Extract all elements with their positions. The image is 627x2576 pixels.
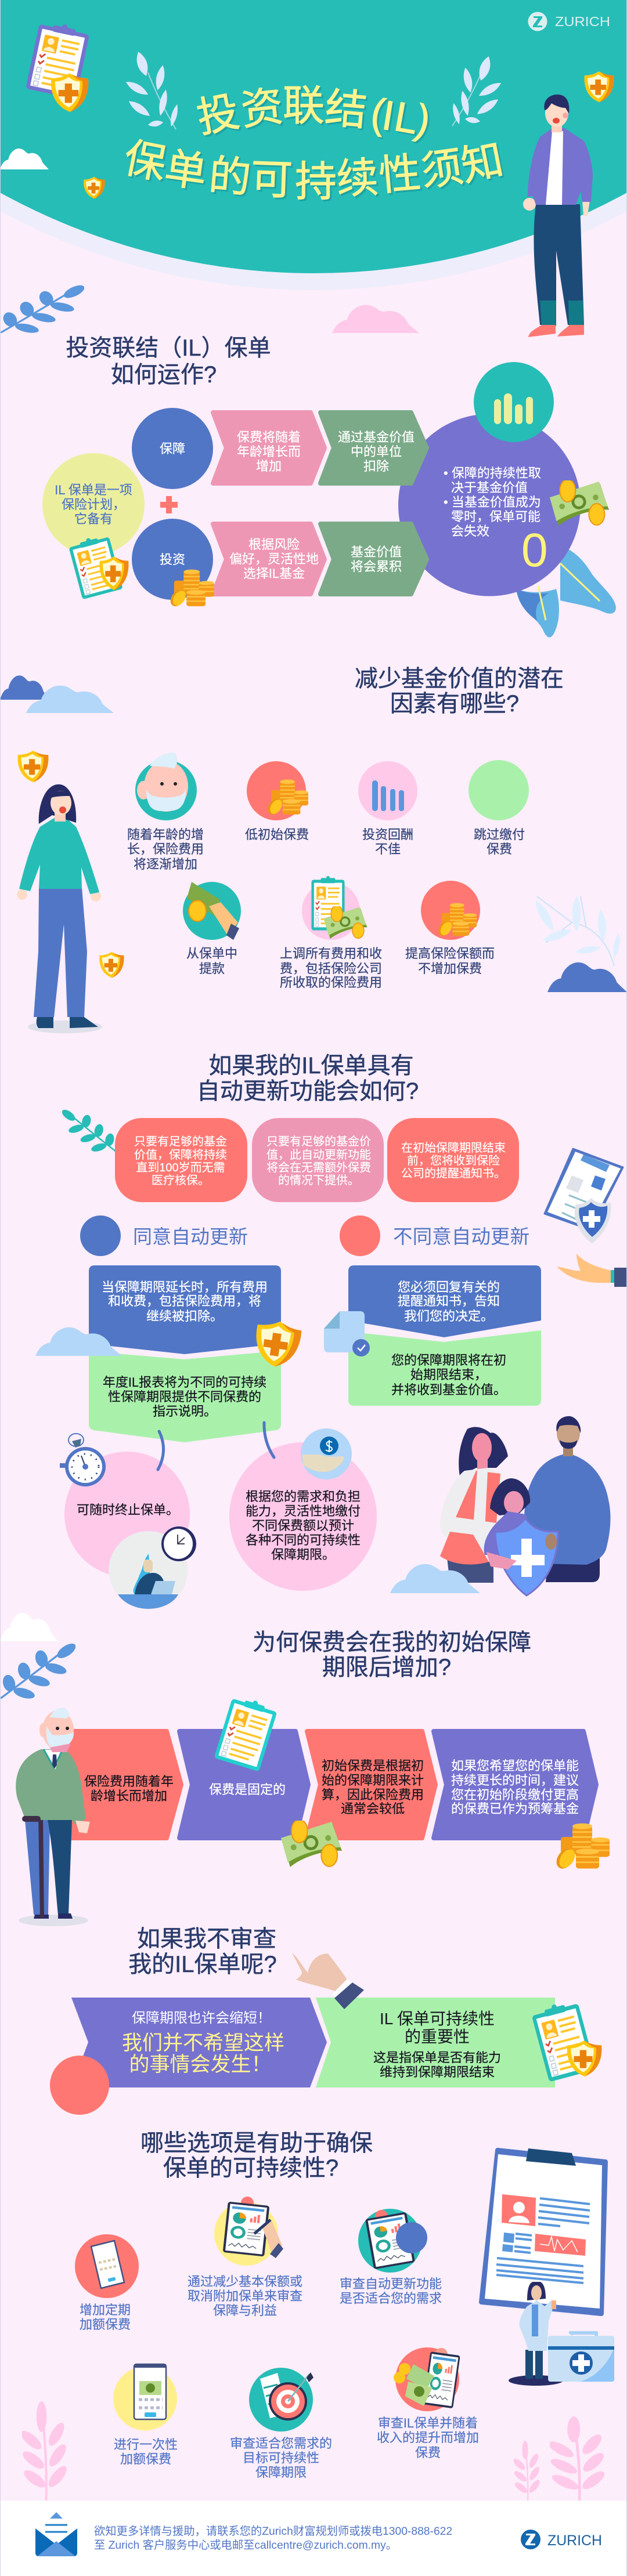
- chevron: flexible funds: 根据风险: [248, 537, 300, 552]
- factor: higher charges: 所收取的保险费用: [280, 975, 382, 990]
- chevron: premium: 年龄增长而: [237, 444, 301, 459]
- factor: higher charges: 费，包括保险公司: [280, 961, 382, 976]
- heading: options: 哪些选项是有助于确保: [140, 2130, 373, 2156]
- chevron: initial premium: 算，因此保险费用: [322, 1788, 424, 1802]
- option: reduce cover: 保障与利益: [213, 2303, 277, 2318]
- cloud: white: [0, 1613, 58, 1641]
- factor: poor returns: [358, 761, 417, 856]
- option: disagree: 不同意自动更新: [393, 1226, 529, 1248]
- option: reduce cover: 通过减少基本保额或: [188, 2274, 302, 2289]
- bubble: flexible premium: 保障期限。: [271, 1547, 335, 1562]
- text: sustainability notes: • 当基金价值成为: [444, 495, 541, 509]
- chevron: pay more early: 的保费已作为预筹基金: [451, 1801, 579, 1816]
- icon: document check: [324, 1311, 370, 1356]
- circle: IL definition: 它备有: [74, 512, 113, 526]
- heading: options: [140, 2130, 373, 2181]
- panel: importance of sustainability: 这是指保单是否有能力: [373, 2050, 501, 2065]
- card: reminder: 公司的提醒通知书。: [401, 1167, 506, 1180]
- factor: missed payment: 跳过缴付: [474, 827, 525, 842]
- card: cover until 100: 医疗核保。: [152, 1174, 210, 1187]
- heading: how IL works: 投资联结（IL）保单: [66, 335, 271, 361]
- clouds: section two: [0, 675, 114, 713]
- panel: cover ends: [348, 1330, 541, 1406]
- panel: agree charges: 和收费，包括保险费用，将: [108, 1294, 261, 1308]
- heading: factors: [355, 666, 564, 717]
- heading: factors: 因素有哪些?: [390, 691, 519, 717]
- icon: pointing hand: [292, 1953, 364, 2009]
- heading: auto renewal: 自动更新功能会如何?: [197, 1079, 419, 1104]
- bubble: flexible premium: 不同保费额以预计: [252, 1518, 354, 1533]
- option: single top-up: 加额保费: [120, 2452, 171, 2466]
- factor: withdrawal: 提款: [199, 961, 225, 976]
- cloud: dark blue: [547, 963, 627, 992]
- option: top up: 增加定期: [80, 2303, 131, 2317]
- panel: reply notice: 提醒通知书，告知: [398, 1294, 500, 1308]
- chevron: premium: 增加: [256, 459, 282, 473]
- factor: poor returns: 不佳: [375, 842, 401, 856]
- icon: clipboard with shield: [26, 19, 91, 112]
- factor: age: 随着年龄的增: [127, 827, 204, 842]
- heading: no review: [128, 1926, 277, 1977]
- bubble: flexible premium: 能力，灵活性地缴付: [246, 1504, 361, 1518]
- option: disagree: [340, 1215, 529, 1256]
- big zero: 0: [521, 524, 548, 577]
- card: cover until 100: 价值，保障将持续: [134, 1148, 227, 1162]
- circle: red accent: [50, 2056, 109, 2115]
- option: agree: 同意自动更新: [133, 1226, 248, 1247]
- bubble: terminate: [64, 1452, 190, 1577]
- factor: low initial premium: [245, 761, 309, 842]
- factor: higher sum assured: [405, 881, 495, 976]
- chevron: deducted: 中的单位: [351, 444, 402, 459]
- text: sustainability notes: 决于基金价值: [451, 480, 528, 495]
- factor: higher charges: [280, 876, 382, 990]
- icon: clipboard and shield: [530, 1998, 601, 2082]
- option: review auto renewal: [340, 2209, 442, 2306]
- heading: no review: 如果我不审查: [137, 1926, 276, 1952]
- icon: plus: [160, 496, 178, 513]
- chevron: flexible funds: 偏好，灵活性地: [229, 552, 319, 566]
- chevron: initial premium: 初始保费是根据初: [322, 1759, 424, 1773]
- chevron: premium rises: [60, 1731, 181, 1838]
- factor: age: 将逐渐增加: [134, 857, 197, 871]
- chevron: pay more early: 持续更长的时间，建议: [451, 1773, 579, 1788]
- chevron: accumulation: 基金价值: [351, 545, 402, 559]
- card: no extra premium: 只要有足够的基金价: [266, 1135, 371, 1148]
- option: reduce cover: [188, 2197, 302, 2318]
- card: cover until 100: 直到100岁而无需: [136, 1161, 225, 1174]
- panel: agree charges: 继续被扣除。: [146, 1309, 223, 1323]
- option: single top-up: 进行一次性: [114, 2437, 178, 2452]
- option: review auto renewal: 是否适合您的需求: [340, 2291, 442, 2306]
- cloud: family: [390, 1564, 480, 1593]
- factor: low initial premium: 低初始保费: [245, 827, 309, 842]
- circle: chart icon: [474, 362, 554, 442]
- panel: annual statement: [89, 1351, 281, 1442]
- chevron: initial premium: 通常会较低: [341, 1801, 405, 1816]
- card: no extra premium: 值，此自动更新功能: [266, 1148, 371, 1162]
- panel: cover ends: 并将收到基金价值。: [391, 1383, 506, 1397]
- heading: why premium increases: 为何保费会在我的初始保障: [253, 1630, 531, 1655]
- text: sustainability notes: 零时，保单可能: [451, 509, 540, 524]
- icon: hand with dollar: [301, 1428, 352, 1479]
- panel: annual statement: 年度IL报表将为不同的可持续: [103, 1375, 266, 1390]
- title: 投资联结(IL): [193, 83, 435, 144]
- panel: importance of sustainability: 维持到保障期限结束: [380, 2065, 495, 2079]
- heading: no review: 我的IL保单呢?: [128, 1952, 277, 1977]
- text: sustainability notes: 会失效: [451, 524, 489, 538]
- option: single top-up: [113, 2364, 178, 2466]
- icon: coins: [553, 1824, 610, 1871]
- sprig: blue: [0, 283, 88, 335]
- chevron: pay more early: 您在初始阶段缴付更高: [451, 1788, 579, 1802]
- option: review with income: 审查IL保单并随着: [378, 2416, 478, 2430]
- option: agree: [80, 1215, 248, 1256]
- option: target: 目标可持续性: [243, 2451, 319, 2465]
- option: review with income: [377, 2347, 479, 2460]
- icon: open hand: [557, 1254, 627, 1287]
- chevron: pay more early: 如果您希望您的保单能: [451, 1759, 579, 1773]
- icon: clipboard: [68, 533, 128, 599]
- logo: Zurich header: [528, 12, 610, 31]
- sprig: blue: [0, 1641, 79, 1701]
- option: review auto renewal: 审查自动更新功能: [340, 2277, 442, 2291]
- icon: money: [550, 479, 609, 526]
- chevron: accumulation: [320, 524, 427, 594]
- card: reminder: 前，您将收到保险: [407, 1154, 500, 1167]
- icon: blue clipboard: [545, 1149, 623, 1243]
- panel: coverage may shorten: 的事情会发生！: [129, 2053, 272, 2076]
- circle: IL definition: 保险计划，: [62, 497, 125, 512]
- title: 保单的可持续性须知: [120, 135, 507, 205]
- factor: higher sum assured: 提高保险保额而: [405, 946, 495, 961]
- chevron: flexible funds: 选择IL基金: [243, 566, 305, 581]
- bubble: flexible premium: 各种不同的可持续性: [246, 1533, 361, 1547]
- card: cover until 100: 只要有足够的基金: [134, 1135, 227, 1148]
- character: woman in teal: [17, 784, 102, 1033]
- icon: envelope: [35, 2512, 77, 2556]
- bubble: terminate: 可随时终止保单。: [77, 1503, 179, 1517]
- icon: money: [281, 1819, 342, 1867]
- text: sustainability notes: • 保障的持续性取: [444, 466, 541, 480]
- icon: shield small: [99, 952, 124, 978]
- factor: poor returns: 投资回酬: [362, 827, 413, 842]
- panel: importance of sustainability: 的重要性: [405, 2028, 470, 2046]
- chevron: deducted: 扣除: [363, 459, 389, 473]
- factor: age: 长，保险费用: [127, 842, 204, 856]
- heading: why premium increases: 期限后增加?: [322, 1655, 451, 1680]
- logo: Zurich footer: ZURICH: [547, 2532, 602, 2549]
- icon: medical box: [548, 2331, 614, 2382]
- illustration: medical report: [481, 2148, 606, 2314]
- icon: wall clock: [161, 1526, 196, 1561]
- factor: higher charges: 上调所有费用和收: [280, 946, 382, 961]
- heading: how IL works: 如何运作?: [111, 362, 217, 388]
- logo: Zurich header: ZURICH: [555, 14, 610, 29]
- laurel: left: [124, 50, 180, 129]
- icon: small shields: [84, 71, 614, 198]
- option: target: 审查适合您需求的: [230, 2436, 332, 2451]
- plant: light leaves: [532, 896, 622, 966]
- connector curves: [158, 1423, 274, 1470]
- chevron: deducted: 通过基金价值: [338, 430, 415, 444]
- circle: IL definition: [42, 453, 145, 555]
- cloud: agree: [35, 1327, 122, 1356]
- panel: coverage may shorten: 我们并不希望这样: [122, 2032, 284, 2054]
- heading: why premium increases: [253, 1630, 531, 1680]
- icon: teal clipboard: [214, 1694, 279, 1772]
- option: reduce cover: 取消附加保单来审查: [188, 2289, 302, 2303]
- chevron: flexible funds: [213, 524, 325, 594]
- circle: result: [398, 414, 581, 596]
- circle: investment: 投资: [160, 552, 185, 567]
- chevron: initial premium: [307, 1731, 435, 1838]
- option: target: [230, 2368, 332, 2480]
- illustration: blue legs: [516, 545, 616, 637]
- panel: reply notice: 我们您的决定。: [404, 1309, 493, 1323]
- option: top up: 加额保费: [80, 2317, 131, 2332]
- icon: tilted shield: [252, 1318, 302, 1370]
- chevron: fixed premium: 保费是固定的: [209, 1782, 286, 1797]
- sprig: teal: [60, 1108, 116, 1153]
- character: doctor: [509, 2282, 563, 2386]
- bubble: flexible premium: [229, 1442, 377, 1591]
- heading: factors: 减少基金价值的潜在: [355, 666, 564, 692]
- header band: [0, 0, 627, 290]
- panel: agree charges: [89, 1265, 281, 1354]
- card: cover until 100: [115, 1118, 247, 1202]
- panel: reply notice: [348, 1265, 541, 1337]
- factor: higher sum assured: 不增加保费: [418, 961, 482, 976]
- chevron: premium rises: 龄增长而增加: [91, 1789, 167, 1803]
- option: target: 保障期限: [255, 2465, 307, 2480]
- chevron: deducted: [320, 413, 427, 483]
- chevron: initial premium: 始的保障期限来计: [322, 1773, 424, 1788]
- panel: importance of sustainability: [316, 1998, 555, 2087]
- logo: Zurich footer: [521, 2530, 602, 2549]
- factor: age: [127, 752, 204, 871]
- chevron: accumulation: 将会累积: [351, 559, 402, 574]
- factor: missed payment: 保费: [487, 842, 512, 856]
- card: no extra premium: [252, 1118, 384, 1202]
- character: man in purple jacket: [523, 95, 593, 337]
- panel: reply notice: 您必须回复有关的: [398, 1280, 500, 1294]
- icon: stopwatch: [60, 1434, 106, 1486]
- text: contact: 欲知更多详情与援助，请联系您的Zurich财富规划师或拨电1300-888-622: [94, 2525, 452, 2538]
- card: no extra premium: 将会在无需额外保费: [266, 1161, 371, 1174]
- panel: cover ends: 始期限结束，: [410, 1367, 487, 1382]
- icon: woman at laptop: [109, 1531, 188, 1609]
- heading: auto renewal: [197, 1053, 419, 1104]
- illustration: family: [440, 1416, 610, 1595]
- circle: IL definition: IL 保单是一项: [55, 483, 132, 497]
- panel: annual statement: 性保障期限提供不同保费的: [108, 1390, 261, 1404]
- heading: auto renewal: 如果我的IL保单具有: [208, 1053, 414, 1079]
- cloud: header white: [0, 149, 49, 169]
- factor: withdrawal: 从保单中: [186, 946, 237, 961]
- chevron: premium: 保费将随着: [237, 430, 301, 444]
- character: old man: [16, 1707, 90, 1926]
- option: review with income: 保费: [415, 2445, 441, 2460]
- option: top up: [75, 2234, 139, 2332]
- circle: investment: [132, 519, 213, 600]
- laurel: right: [451, 55, 503, 126]
- card: reminder: [387, 1118, 519, 1202]
- factor: withdrawal: [183, 882, 241, 976]
- circle: protection: [132, 408, 213, 489]
- circle: protection: 保障: [160, 442, 185, 456]
- text: contact: 至 Zurich 客户服务中心或电邮至callcentre@zurich.com.my。: [94, 2539, 397, 2552]
- heading: how IL works: [66, 335, 271, 388]
- panel: cover ends: 您的保障期限将在初: [391, 1353, 506, 1367]
- chevron: pay more early: [434, 1731, 596, 1838]
- plants: pink: [18, 2401, 608, 2501]
- icon: coins: [168, 570, 214, 607]
- card: no extra premium: 的情况下提供。: [278, 1174, 359, 1187]
- bubble: flexible premium: 根据您的需求和负担: [246, 1489, 361, 1504]
- option: review with income: 收入的提升而增加: [377, 2430, 479, 2445]
- card: reminder: 在初始保障期限结束: [401, 1141, 506, 1155]
- title: [120, 83, 507, 205]
- panel: coverage may shorten: [71, 1998, 327, 2087]
- chevron: premium: [213, 413, 325, 483]
- panel: coverage may shorten: 保障期限也许会缩短！: [132, 2010, 271, 2026]
- panel: annual statement: 指示说明。: [153, 1404, 217, 1419]
- footer: [0, 2501, 627, 2576]
- cloud: pink: [332, 305, 419, 333]
- chevron: fixed premium: [179, 1731, 308, 1838]
- icon: shield: [18, 751, 48, 782]
- chevron: premium rises: 保险费用随着年: [84, 1774, 174, 1789]
- panel: agree charges: 当保障期限延长时，所有费用: [102, 1280, 268, 1294]
- factor: missed payment: [469, 760, 529, 856]
- heading: options: 保单的可持续性?: [163, 2155, 338, 2181]
- panel: importance of sustainability: IL 保单可持续性: [380, 2010, 495, 2028]
- panel: how IL works: [42, 362, 616, 637]
